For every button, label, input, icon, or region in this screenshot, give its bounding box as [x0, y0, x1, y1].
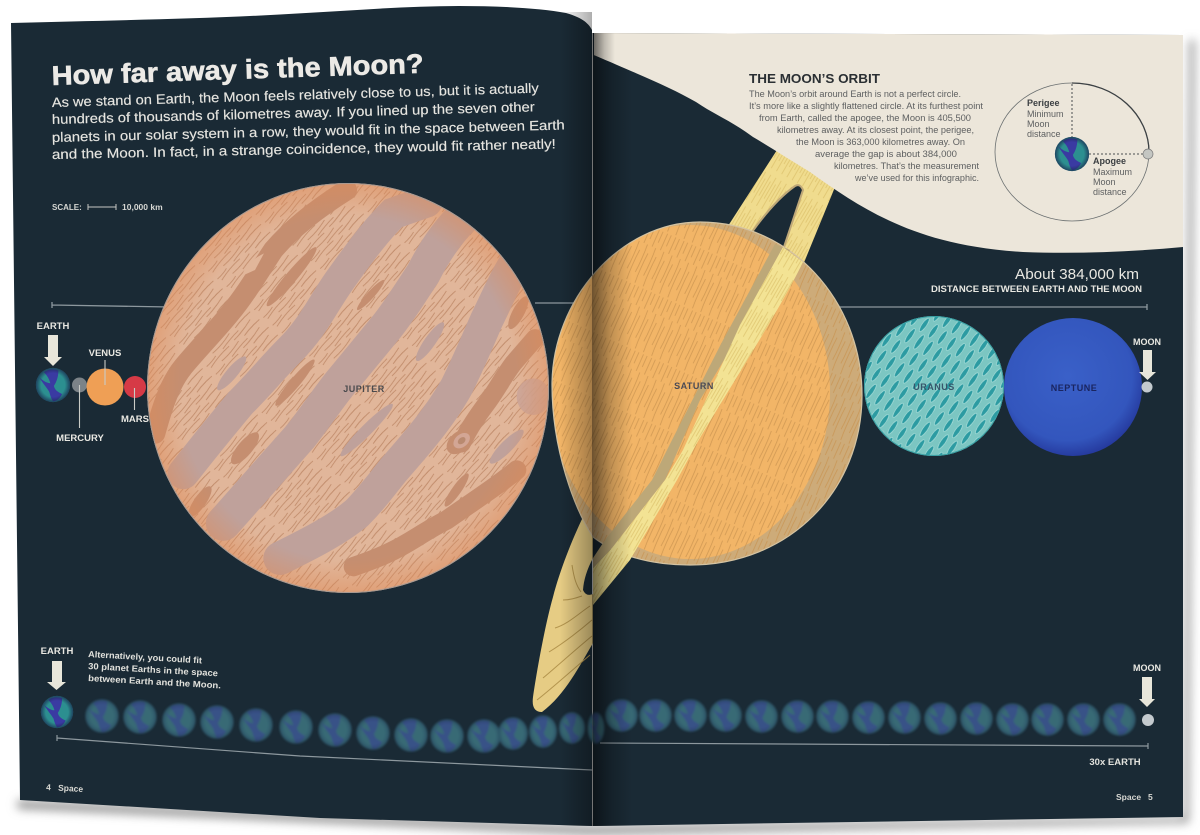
text block: intro: As we stand on Earth, the Moon feels relatively close to us, but it is actually	[52, 81, 539, 110]
label: Jupiter: JUPITER	[343, 384, 385, 394]
label: Perigee	[1027, 98, 1064, 139]
label: Uranus: URANUS	[913, 382, 955, 392]
text block: orbit explanation: The Moon’s orbit around Earth is not a perfect circle.	[749, 89, 961, 99]
label: Apogee	[1093, 156, 1132, 197]
first Earth, full colour	[41, 696, 73, 728]
planet: Venus	[86, 368, 124, 406]
scale bar	[52, 202, 163, 212]
planet: Uranus	[864, 316, 1004, 456]
label: Apogee: Apogee	[1093, 156, 1126, 166]
text block: orbit explanation: average the gap is about 384,000	[815, 149, 957, 159]
title: How far away is the Moon?	[51, 49, 424, 91]
label: Perigee: Moon	[1027, 119, 1050, 129]
label: Mars: MARS	[121, 414, 149, 425]
arrow: Earth	[44, 335, 62, 366]
planet: Neptune	[1004, 318, 1142, 456]
bottom Moon marker	[1133, 663, 1161, 726]
distance heading	[931, 266, 1142, 294]
text block: 30 Earths: between Earth and the Moon.	[88, 673, 221, 690]
Saturn ring, front band	[593, 244, 803, 605]
text block: orbit explanation: from Earth, called the apogee, the Moon is 405,500	[759, 113, 971, 123]
planet: Earth	[36, 368, 70, 402]
distance line bottom	[57, 735, 1148, 770]
text block: orbit explanation: It’s more like a slightly flattened circle. At its furthest point	[749, 101, 984, 111]
page number right: 5	[1148, 792, 1153, 802]
icon: Moon	[1143, 149, 1153, 159]
label: Saturn: SATURN	[674, 381, 714, 391]
planet: Saturn	[550, 220, 865, 605]
label: Perigee: distance	[1027, 129, 1061, 139]
page number left: Space	[58, 783, 84, 794]
label: Perigee: Minimum	[1027, 109, 1064, 119]
label: Mercury: MERCURY	[56, 433, 104, 444]
heading: The Moon's orbit: THE MOON’S ORBIT	[749, 72, 880, 86]
label: Apogee: distance	[1093, 187, 1127, 197]
text block: orbit explanation: the Moon is 363,000 kilometres away. On	[796, 137, 965, 147]
label: Apogee: Maximum	[1093, 167, 1132, 177]
panel: right page	[593, 33, 1183, 826]
page number right	[1116, 792, 1153, 802]
text block: intro: hundreds of thousands of kilometres away. If you lined up the seven other	[52, 99, 535, 127]
icon: Earth	[1055, 137, 1089, 171]
label: 30x Earth: 30x EARTH	[1089, 757, 1141, 768]
text block: orbit explanation	[749, 89, 984, 183]
label: Moon: MOON	[1133, 337, 1161, 347]
Moon marker, top row	[1133, 337, 1161, 392]
leader lines	[80, 360, 134, 428]
distance heading: DISTANCE BETWEEN EARTH AND THE MOON	[931, 284, 1142, 294]
planet: Jupiter	[140, 180, 560, 600]
scale bar: SCALE:	[52, 203, 82, 212]
text block: 30 Earths: 30 planet Earths in the space	[88, 661, 218, 678]
panel: left page	[11, 6, 592, 826]
scale bar: 10,000 km	[122, 202, 163, 212]
label: Earth: EARTH	[37, 321, 69, 332]
label: Apogee: Moon	[1093, 177, 1116, 187]
icon: Moon	[1142, 714, 1154, 726]
label: Earth: EARTH	[41, 646, 73, 657]
text block: intro: planets in our solar system in a row, they would fit in the space between Earth	[52, 117, 565, 145]
distance line top	[52, 302, 1147, 310]
planet: Mercury	[72, 378, 87, 392]
inner planets group	[36, 321, 149, 444]
Saturn ring, back arch and lower lobe	[533, 130, 835, 712]
arrow: Moon	[1139, 350, 1156, 380]
panel: Moon's orbit cream wave	[594, 33, 1183, 253]
diagram: Moon's orbit	[995, 83, 1153, 221]
page number right: Space	[1116, 792, 1141, 802]
text block: orbit explanation: kilometres away. At its closest point, the perigee,	[777, 125, 974, 135]
page number left	[46, 782, 84, 794]
text block: 30 Earths: Alternatively, you could fit	[88, 649, 202, 665]
text block: intro: and the Moon. In fact, in a strange coincidence, they would fit rather neatly!	[52, 136, 556, 162]
text block: 30 Earths	[88, 649, 221, 690]
row of 30 Earths	[41, 696, 1136, 753]
label: Perigee: Perigee	[1027, 98, 1060, 108]
text block: intro	[52, 81, 565, 162]
text block: orbit explanation: we’ve used for this infographic.	[854, 173, 979, 183]
icon: Moon	[1142, 382, 1152, 392]
arrow: Earth	[47, 661, 66, 690]
text block: orbit explanation: kilometres. That’s the measurement	[834, 161, 980, 171]
label: Moon: MOON	[1133, 663, 1161, 673]
gutter shading	[560, 12, 632, 826]
label: Neptune: NEPTUNE	[1051, 383, 1097, 393]
arrow: Moon	[1139, 677, 1155, 707]
bottom Earth marker	[41, 646, 73, 690]
page number left: 4	[46, 782, 51, 792]
planet: Mars	[124, 376, 146, 398]
label: Venus: VENUS	[89, 348, 121, 359]
distance heading: About 384,000 km	[1015, 266, 1139, 283]
